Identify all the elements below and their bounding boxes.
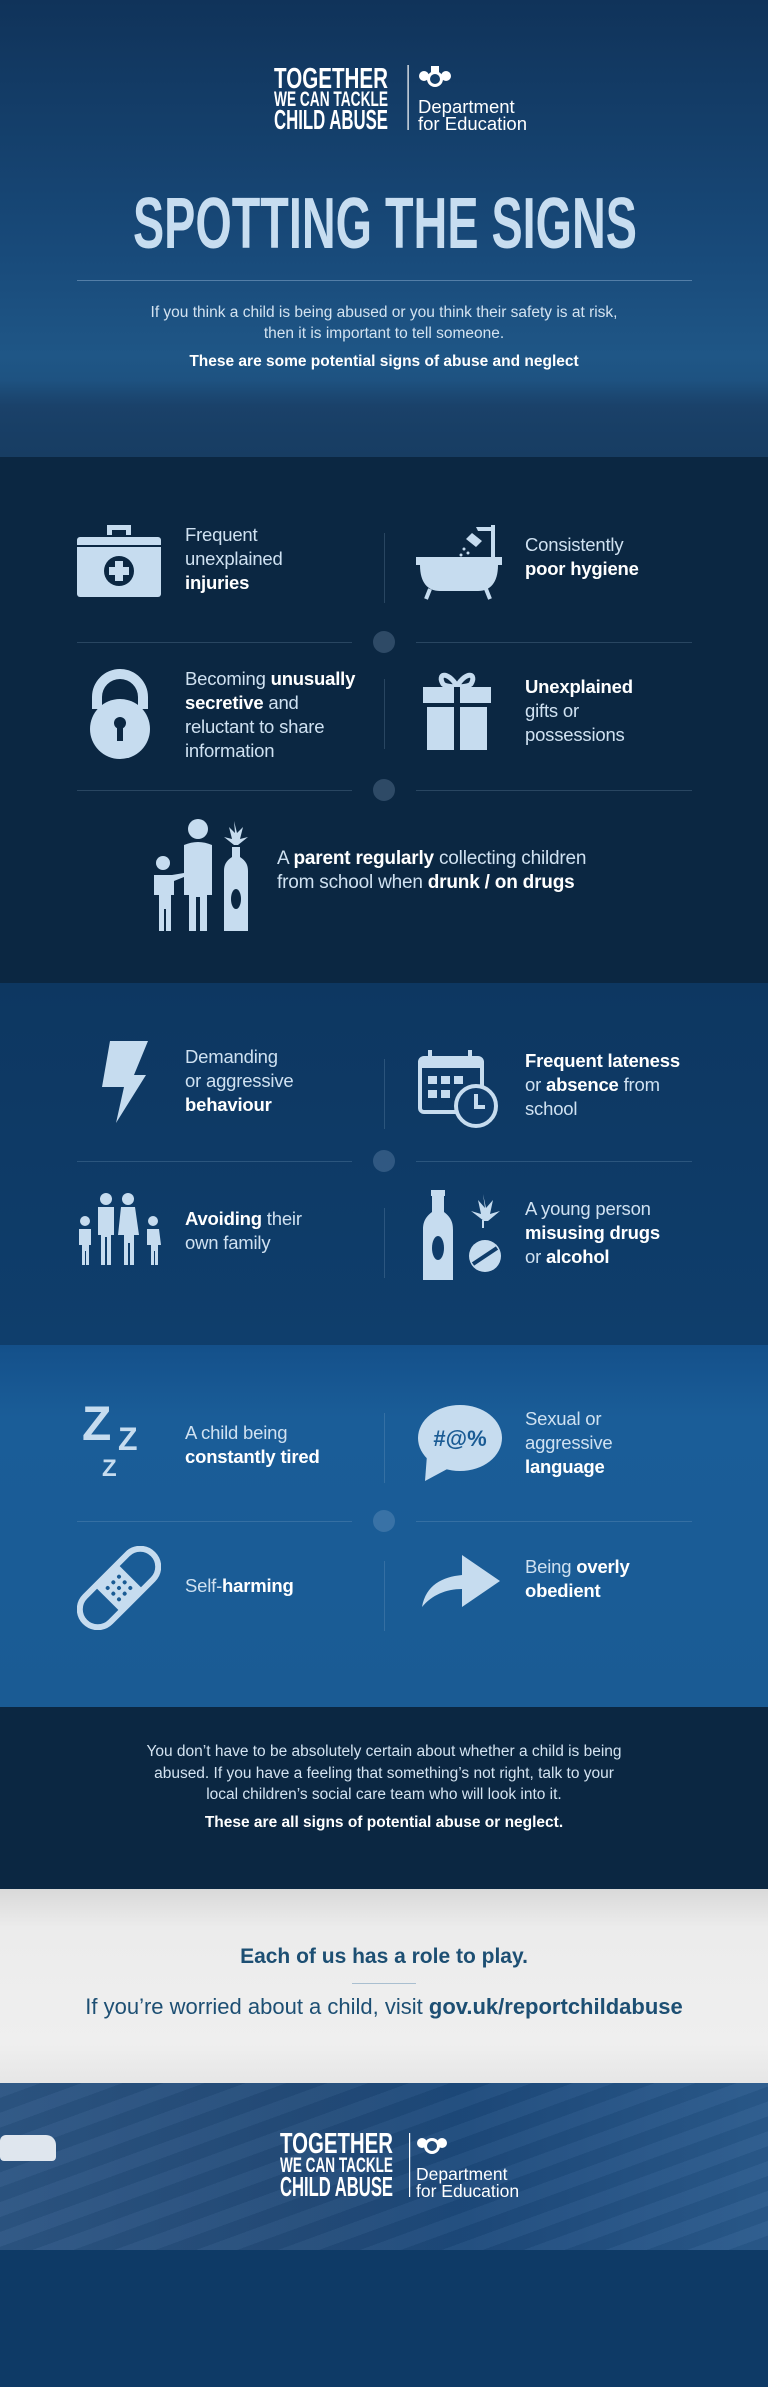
skyline [0, 380, 768, 457]
text: lateness: school [525, 1098, 577, 1119]
text: closing note: You don’t have to be absolutely certain about whether a child is being [146, 1743, 622, 1760]
panel: signs group 2 [0, 983, 768, 1345]
icon: calendar clock [418, 1050, 498, 1128]
text: parent: from school when drunk / on drugs [277, 872, 574, 893]
header panel [0, 0, 768, 457]
intro text: If you think a child is being abused or you think their safety is at risk, [151, 304, 617, 321]
text: behaviour: Demanding [185, 1046, 278, 1067]
heading: role to play: Each of us has a role to play. [240, 1945, 528, 1968]
bottom band [0, 2250, 768, 2387]
text: family [185, 1208, 302, 1253]
text: parent [277, 848, 586, 893]
icon: bottle, cannabis, pill [423, 1190, 501, 1280]
panel: closing note [0, 1707, 768, 1889]
icon: plaster [77, 1546, 161, 1630]
text: injuries [185, 524, 283, 593]
text: gifts: Unexplained [525, 676, 633, 697]
text: drugs [525, 1198, 660, 1267]
icon: speech bubble: #@% [433, 1426, 487, 1451]
text: language: language [525, 1456, 605, 1477]
icon: lightning [102, 1041, 148, 1123]
text: parent: A parent regularly collecting children [277, 848, 586, 869]
text: gifts: gifts or [525, 700, 579, 721]
text: language: Sexual or [525, 1408, 601, 1429]
text: drugs: misusing drugs [525, 1222, 660, 1243]
text: injuries: Frequent [185, 524, 257, 545]
text: self-harming: Self-harming [185, 1575, 294, 1596]
icon: parent with child and bottle [154, 819, 248, 931]
text: language: aggressive [525, 1432, 612, 1453]
text: gifts: possessions [525, 724, 625, 745]
logo bottom [280, 2131, 519, 2201]
text: closing note: These are all signs of potential abuse or neglect. [205, 1814, 563, 1830]
icon: zzz: Z [82, 1398, 111, 1451]
text: injuries: unexplained [185, 548, 283, 569]
icon: medical kit [77, 525, 161, 597]
icon: padlock [90, 669, 150, 759]
intro text [151, 304, 617, 370]
text: obedient: Being overly [525, 1556, 630, 1577]
panel: signs group 1 [0, 457, 768, 983]
logo bottom: for Education [416, 2181, 519, 2201]
text: language [525, 1408, 612, 1477]
text: behaviour [185, 1046, 293, 1115]
icon: zzz [82, 1398, 138, 1478]
panel: call to action [0, 1889, 768, 2083]
text: closing note: abused. If you have a feeling that something’s not right, talk to your [154, 1764, 614, 1782]
text: behaviour: or aggressive [185, 1070, 293, 1091]
text: tired [185, 1422, 320, 1467]
text: behaviour: behaviour [185, 1094, 272, 1115]
text: tired: constantly tired [185, 1446, 320, 1467]
logo top: CHILD ABUSE [274, 104, 388, 135]
text: closing note: local children’s social care team who will look into it. [206, 1786, 562, 1803]
text: injuries: injuries [185, 572, 249, 593]
text: visit link: If you’re worried about a child, visit gov.uk/reportchildabuse [85, 1994, 683, 2019]
text: family: Avoiding their [185, 1208, 302, 1229]
text: family: own family [185, 1232, 270, 1253]
text: drugs: or alcohol [525, 1246, 609, 1267]
logo top: TOGETHER [274, 63, 388, 95]
icon: bath [416, 525, 502, 600]
text: secretive: Becoming unusually secretive and reluctant to share information [185, 668, 355, 761]
text: lateness: or absence from [525, 1074, 660, 1095]
text: tired: A child being [185, 1422, 287, 1443]
logo top: Department [418, 96, 515, 117]
icon: gift [423, 672, 491, 750]
logo top [274, 63, 527, 135]
icon: arrow [422, 1555, 500, 1607]
panel: footer photo with logo [0, 2083, 768, 2250]
text: hygiene: Consistently [525, 534, 623, 555]
text: gifts [525, 676, 633, 745]
text: lateness: Frequent lateness [525, 1050, 680, 1071]
logo top: for Education [418, 113, 527, 134]
text: obedient: obedient [525, 1580, 600, 1601]
icon: family [79, 1193, 161, 1265]
text: drugs: A young person [525, 1198, 651, 1219]
logo bottom: WE CAN TACKLE [280, 2154, 393, 2177]
intro text: These are some potential signs of abuse and neglect [189, 353, 579, 370]
icon: speech bubble [418, 1405, 502, 1481]
text: hygiene [525, 534, 639, 579]
icon: zzz: Z [118, 1421, 138, 1457]
text: lateness [525, 1050, 680, 1119]
intro text: then it is important to tell someone. [264, 325, 504, 342]
logo top: WE CAN TACKLE [274, 88, 388, 111]
text: closing note [146, 1743, 622, 1830]
text: obedient [525, 1556, 630, 1601]
text: hygiene: poor hygiene [525, 558, 639, 579]
logo bottom: Department [416, 2164, 508, 2184]
panel: signs group 3 [0, 1345, 768, 1707]
